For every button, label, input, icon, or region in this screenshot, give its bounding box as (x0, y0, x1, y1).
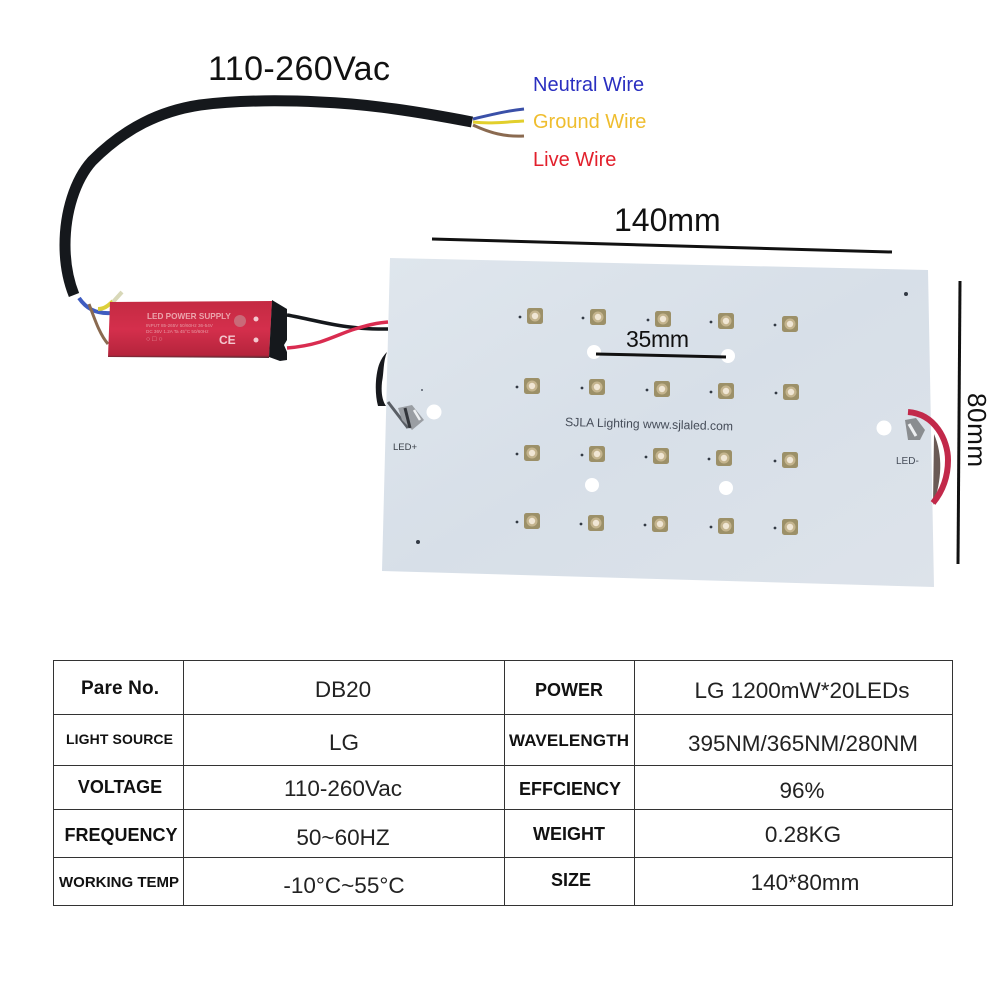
power supply (108, 300, 388, 361)
table values: LG 1200mW*20LEDs (694, 678, 910, 703)
heading: input voltage: 110-260Vac (208, 50, 390, 88)
table labels: POWER (535, 680, 603, 700)
power supply: LED POWER SUPPLY (147, 312, 231, 321)
board print: SJLA Lighting www.sjlaled.com (565, 415, 733, 433)
table labels: EFFCIENCY (519, 779, 621, 799)
LED board: LED- (896, 456, 919, 467)
table values: -10°C~55°C (283, 873, 405, 898)
table labels: FREQUENCY (64, 825, 178, 845)
mounting holes (426, 345, 892, 495)
table labels: Pare No. (81, 678, 159, 699)
dimension: 140mm: 140mm (614, 202, 721, 238)
power supply: DC 36V 1.2A Ta 45°C 50/60Hz (146, 329, 209, 334)
legend: wire colours (533, 74, 646, 171)
table values: 140*80mm (751, 870, 859, 895)
power supply: INPUT 85-265V 50/60Hz 36-54V (146, 323, 214, 328)
table labels: WAVELENGTH (509, 731, 629, 750)
table grid (53, 660, 953, 906)
LED array (516, 308, 799, 535)
table values: 50~60HZ (296, 825, 390, 850)
dimension: 35mm (596, 326, 726, 357)
table values: 395NM/365NM/280NM (688, 731, 918, 756)
table values: 96% (779, 778, 825, 803)
LED board: LED+ (393, 442, 417, 453)
input cable (65, 101, 524, 344)
LED board (382, 258, 934, 587)
table labels: VOLTAGE (78, 777, 162, 797)
right board lead (905, 412, 948, 505)
table labels: LIGHT SOURCE (66, 731, 173, 747)
table values: 0.28KG (765, 822, 841, 847)
legend: wire colours: Neutral Wire (533, 74, 644, 96)
table values (283, 677, 918, 898)
power supply: ○ □ ○ (146, 336, 163, 343)
dimension: 140mm (432, 202, 892, 252)
table labels: WORKING TEMP (59, 874, 179, 891)
dimension: 80mm: 80mm (962, 393, 992, 467)
left board lead (376, 352, 387, 406)
table labels: WEIGHT (533, 824, 605, 844)
table labels (59, 678, 629, 891)
legend: wire colours: Live Wire (533, 149, 616, 171)
spec table (53, 660, 953, 906)
table values: 110-260Vac (284, 776, 402, 801)
table values: LG (329, 730, 359, 755)
left solder pad (388, 402, 424, 430)
table labels: SIZE (551, 870, 591, 890)
legend: wire colours: Ground Wire (533, 111, 646, 133)
power supply: CE (219, 333, 236, 347)
dimension: 35mm: 35mm (626, 326, 689, 352)
table values: DB20 (315, 677, 371, 702)
